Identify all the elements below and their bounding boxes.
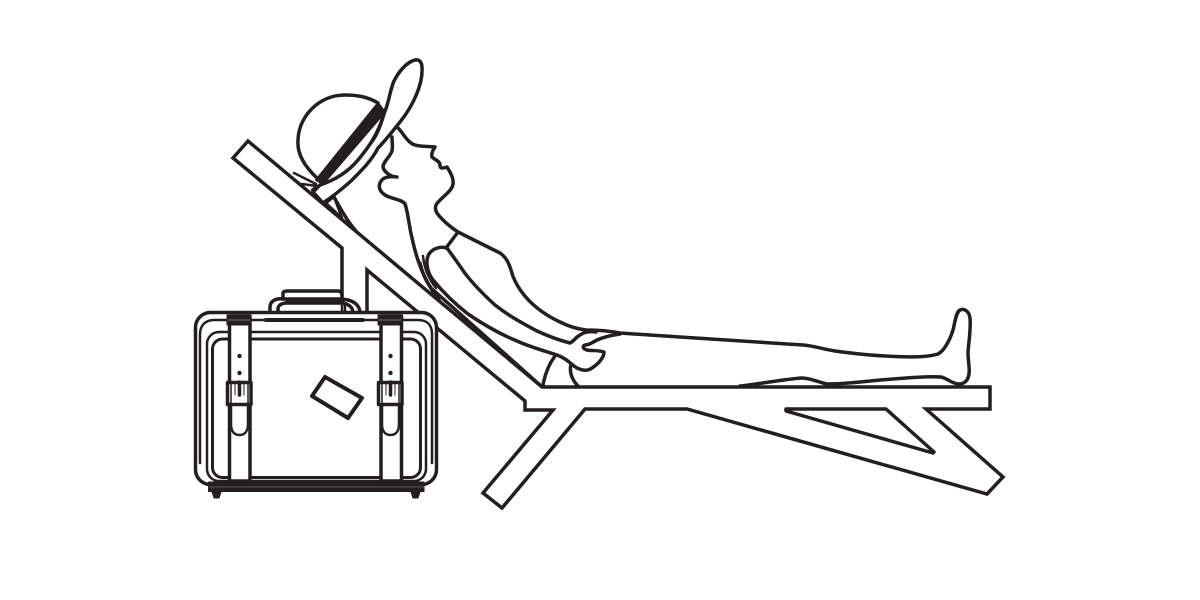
right strap (378, 315, 402, 481)
body side line (420, 263, 541, 386)
hat brim (313, 60, 422, 203)
lounger inner triangle (786, 409, 934, 453)
luggage tag (312, 377, 362, 418)
shorts hem lines (543, 356, 578, 386)
left strap (227, 315, 251, 481)
upper body line (333, 195, 356, 231)
hair tuft (294, 173, 317, 190)
collar triangle (326, 197, 342, 218)
handle base bar (266, 318, 363, 322)
suitcase bottom rail (208, 482, 424, 492)
face and torso outline (397, 127, 970, 386)
arm (427, 247, 620, 370)
suitcase handle (270, 291, 360, 318)
suitcase (196, 291, 436, 498)
suitcase inner panels (207, 332, 426, 481)
suitcase feet (212, 492, 420, 498)
woman figure (326, 127, 970, 386)
hat crown (298, 95, 378, 178)
suitcase second outline (200, 320, 432, 463)
suitcase outer shell (196, 312, 436, 484)
sun lounger frame (233, 141, 1003, 508)
hair line at the back of the neck and ear (379, 137, 439, 300)
sleeve line (446, 232, 458, 248)
hat band (316, 103, 385, 184)
sun hat (294, 60, 422, 203)
arm upper edge and hand top (447, 248, 596, 343)
brim underside shadow (366, 113, 385, 150)
